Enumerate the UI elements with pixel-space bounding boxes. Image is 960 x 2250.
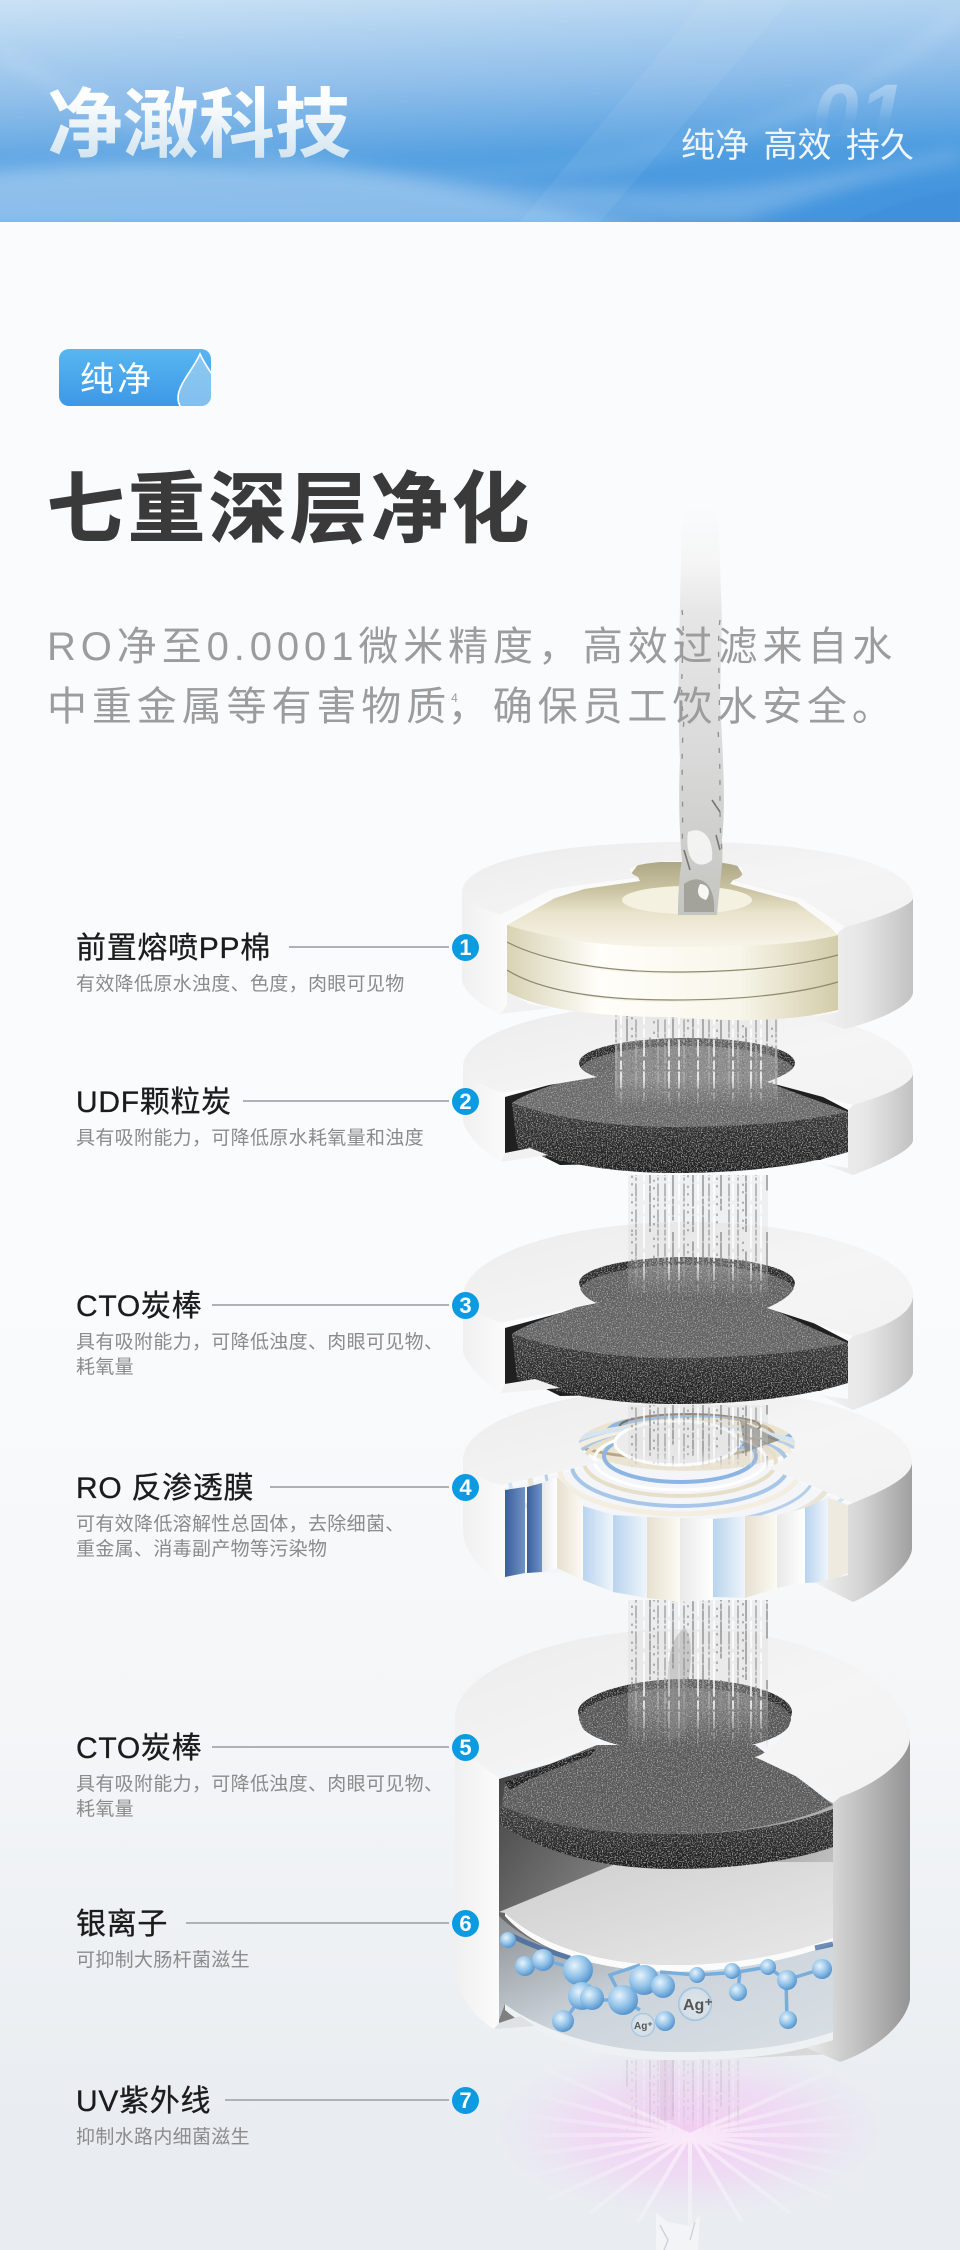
label 6: silver ion: [76, 1908, 479, 1971]
label 1 number: 1: [459, 934, 472, 960]
label 3 description: 耗氧量: [76, 1357, 134, 1378]
housing top: [463, 1003, 913, 1105]
header title: 净澉科技: [47, 83, 351, 168]
label 3 title: CTO炭棒: [76, 1290, 202, 1323]
header band: [0, 0, 960, 230]
uv glow: [540, 2060, 840, 2202]
housing left wall: [463, 1067, 505, 1162]
label 7 title: UV紫外线: [76, 2085, 211, 2118]
label 5 number: 5: [459, 1734, 472, 1760]
label 5 title: CTO炭棒: [76, 1732, 202, 1765]
label 5 description: [76, 1774, 443, 1820]
label 6 leader line: [186, 1922, 449, 1924]
badge label: 纯净: [80, 361, 154, 399]
water: filter 3 to filter 4: [628, 1405, 768, 1469]
cream layer 2: [507, 942, 838, 1000]
pleated membrane panels: [505, 1477, 848, 1602]
housing top: [463, 1222, 913, 1336]
label 1: PP cotton: [76, 932, 479, 995]
label 6 title: 银离子: [76, 1908, 168, 1941]
label 6 number: [452, 1910, 479, 1936]
label 4 description: [76, 1514, 405, 1560]
silver ion disc: [499, 1862, 833, 1965]
carbon block side: [500, 1806, 833, 1869]
label 7 number: [452, 2086, 479, 2114]
intro paragraph: 中重金属等有害物质4，确保员工饮水安全。: [47, 685, 897, 729]
label 1 title: 前置熔喷PP棉: [76, 932, 271, 965]
water: filter 4 to filter 5: [628, 1600, 768, 1750]
label 3 description: 具有吸附能力，可降低浊度、肉眼可见物、: [76, 1332, 443, 1353]
label 4 title: RO 反渗透膜: [76, 1472, 254, 1505]
label 5 description: 耗氧量: [76, 1799, 134, 1820]
label 2 number: [452, 1088, 479, 1114]
label 4: RO membrane: [76, 1472, 479, 1560]
housing left wall: [455, 1718, 499, 2029]
header tagline: 纯净 高效 持久: [681, 127, 914, 165]
chamber and top face: [507, 862, 838, 1020]
filter 4: RO membrane: [463, 1388, 912, 1602]
label 3: CTO carbon rod: [76, 1290, 479, 1378]
label 7 description: 抑制水路内细菌滋生: [76, 2127, 250, 2148]
cream layer 1: [507, 925, 838, 972]
silver ion labels: Ag⁺: [683, 1997, 713, 2014]
label 5 number: [452, 1734, 479, 1760]
label 2: UDF carbon: [76, 1086, 479, 1149]
main heading: 七重深层净化: [47, 467, 533, 553]
housing left wall: [463, 1297, 505, 1393]
label 2 leader line: [243, 1100, 449, 1102]
carbon top: [512, 1037, 848, 1127]
housing right wall: [815, 1462, 912, 1602]
label 4 description: 重金属、消毒副产物等污染物: [76, 1539, 327, 1560]
label 3 description: [76, 1332, 443, 1378]
label 7 leader line: [225, 2099, 449, 2101]
label 5 description: 具有吸附能力，可降低浊度、肉眼可见物、: [76, 1774, 443, 1795]
label 7: UV: [76, 2085, 479, 2148]
label 4 number: 4: [459, 1474, 472, 1500]
label 4 number: [452, 1474, 479, 1500]
label 3 leader line: [212, 1304, 449, 1306]
membrane inner and swirl: [505, 1408, 848, 1573]
label 2 title: UDF颗粒炭: [76, 1086, 232, 1119]
filter 5-7: carbon, silver ion, and UV housing: [455, 1629, 910, 2062]
molecule chamber: [499, 1916, 833, 2052]
water stream: top pour: [678, 507, 724, 915]
silver ion molecules: Ag⁺: [634, 2021, 653, 2032]
housing right wall: [810, 898, 913, 1029]
water: filter 2 to filter 3: [628, 1175, 768, 1300]
label 2 description: 具有吸附能力，可降低原水耗氧量和浊度: [76, 1128, 424, 1149]
label 1 leader line: [289, 946, 449, 948]
housing left wall: [462, 893, 507, 1014]
label 3 number: [452, 1292, 479, 1318]
housing top: [462, 842, 913, 927]
cream layer 3: [507, 970, 838, 1020]
label 3 number: 3: [459, 1292, 472, 1318]
filter 3: CTO carbon rod: [463, 1222, 913, 1410]
water stream: below UV lamp: [656, 2213, 700, 2250]
filter 1: pre-filter PP cotton: [462, 507, 913, 1029]
housing right wall: [820, 1073, 913, 1175]
label 5 leader line: [212, 1746, 449, 1748]
water: filter 1 to filter 2: [615, 1010, 778, 1108]
label 2 number: 2: [459, 1088, 472, 1114]
icon: water drop: [177, 352, 211, 406]
intro paragraph: [47, 625, 897, 729]
housing right wall: [805, 1737, 910, 2062]
silver ion molecules: [500, 1932, 833, 2037]
window backdrop: [499, 1750, 833, 2060]
label 1 number: [452, 934, 479, 960]
filter 2: UDF granular carbon: [463, 1003, 913, 1175]
label 7 number: 7: [459, 2088, 472, 2112]
label 6 number: 6: [459, 1910, 472, 1936]
housing left wall: [463, 1460, 505, 1583]
housing top: [455, 1629, 910, 1797]
housing right wall: [820, 1295, 913, 1410]
carbon block top: [502, 1678, 833, 1834]
label 5: CTO carbon rod: [76, 1732, 479, 1820]
label 6 description: 可抑制大肠杆菌滋生: [76, 1950, 250, 1971]
label 4 description: 可有效降低溶解性总固体，去除细菌、: [76, 1514, 405, 1535]
housing top: [463, 1388, 912, 1503]
label 4 leader line: [270, 1486, 449, 1488]
carbon side: [512, 1103, 848, 1173]
carbon side: [512, 1334, 848, 1404]
carbon top: [512, 1256, 848, 1358]
intro paragraph: RO净至0.0001微米精度，高效过滤来自水: [47, 625, 897, 669]
label 1 description: 有效降低原水浊度、色度，肉眼可见物: [76, 974, 405, 995]
badge: [59, 349, 211, 406]
